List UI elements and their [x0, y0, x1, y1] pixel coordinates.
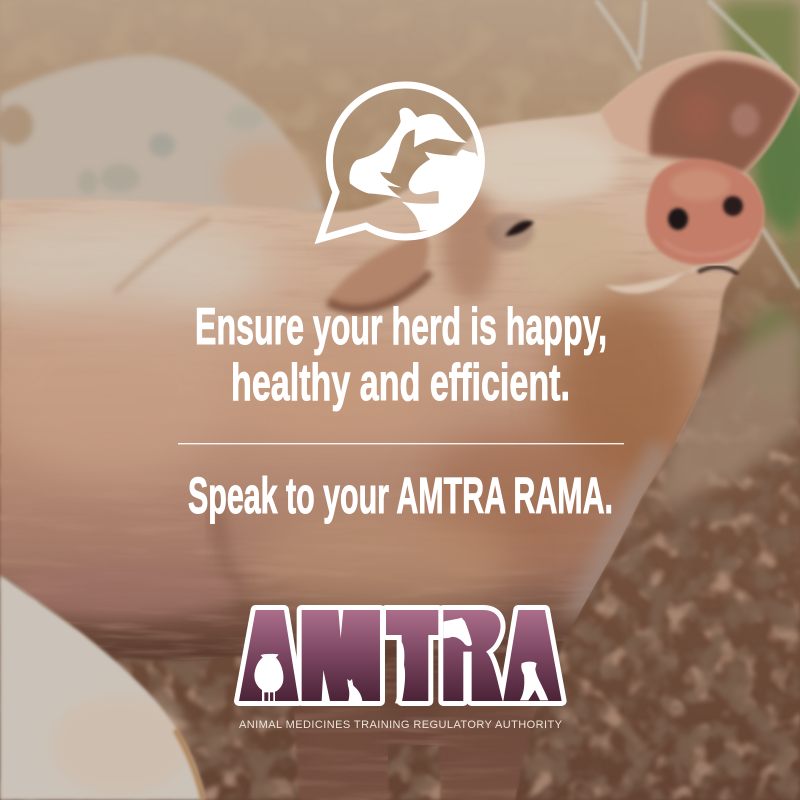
eye [486, 214, 534, 250]
far ear [600, 52, 800, 172]
headline: ensure your herd: healthy and efficient. [231, 354, 570, 412]
logo: sheep [254, 654, 283, 701]
logo: letters A M T R A [239, 610, 562, 701]
ear flap centre [328, 232, 429, 309]
icon: cow silhouette [349, 108, 467, 198]
AMTRA logo [239, 610, 562, 703]
logo: horse head [443, 618, 472, 646]
icon: speech bubble with farm animals [320, 85, 483, 239]
logo: white outline [239, 610, 562, 701]
mouth and lip [605, 265, 738, 294]
lower left pig [0, 575, 205, 800]
headline: ensure your herd [195, 298, 607, 412]
snout [646, 159, 764, 265]
logo strapline: ANIMAL MEDICINES TRAINING REGULATORY AUTHORITY [239, 719, 563, 731]
logo: cat [347, 679, 362, 701]
back pig [0, 55, 325, 212]
logo: dog [520, 662, 548, 700]
divider line [178, 443, 624, 444]
icon: pig silhouette [402, 150, 483, 231]
logo: horse tail in T [395, 638, 405, 703]
